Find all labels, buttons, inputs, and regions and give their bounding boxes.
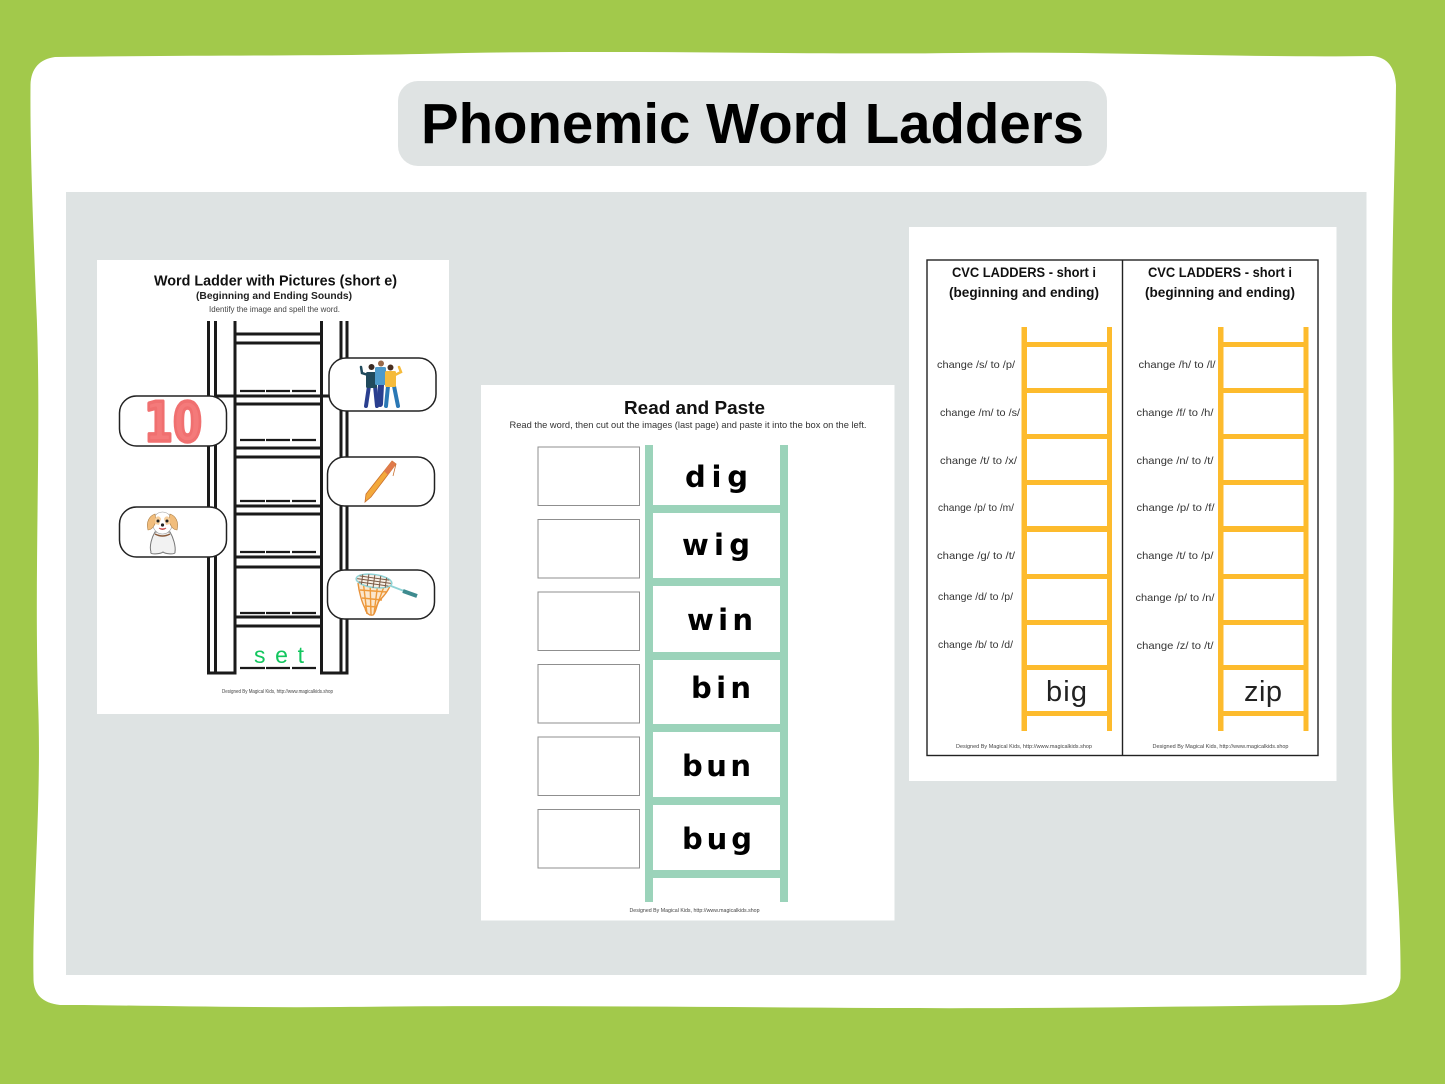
panel: word ladder with pictures worksheet: [97, 260, 449, 714]
panel: read and paste worksheet: [481, 385, 894, 920]
right column heading: [1145, 265, 1295, 300]
ladder words: wig: [682, 528, 750, 562]
ladder words: bun: [682, 749, 751, 783]
left change instructions: change /t/ to /x/: [940, 455, 1017, 467]
ladder word: zip: zip: [1244, 676, 1282, 708]
ladder word: big: big: [1046, 676, 1087, 708]
right change instructions: [1136, 359, 1216, 652]
left change instructions: change /s/ to /p/: [937, 359, 1015, 371]
right column heading: (beginning and ending): [1145, 285, 1295, 300]
right change instructions: change /p/ to /f/: [1136, 502, 1215, 514]
left change instructions: change /p/ to /m/: [938, 502, 1014, 514]
title: Phonemic Word Ladders: [421, 92, 1084, 156]
worksheet instruction: Read the word, then cut out the images (last page) and paste it into the box on the left.: [510, 420, 866, 431]
right change instructions: change /p/ to /n/: [1136, 592, 1215, 604]
right change instructions: change /n/ to /t/: [1136, 455, 1214, 467]
black ladder: [208, 321, 347, 673]
picture card: 10: 10: [144, 391, 202, 454]
paste boxes: [538, 447, 640, 868]
ladder words: win: [687, 603, 753, 637]
picture card: net: [328, 570, 434, 619]
green ladder: [645, 445, 788, 902]
worksheet heading: Read and Paste: [624, 397, 765, 418]
left column heading: (beginning and ending): [949, 285, 1099, 300]
left change instructions: [937, 359, 1020, 651]
ladder words: [682, 460, 753, 856]
ladder word: set: set: [254, 642, 305, 668]
right change instructions: change /z/ to /t/: [1136, 640, 1214, 652]
right credit: Designed By Magical Kids, http://www.magicalkids.shop: [1152, 744, 1289, 750]
worksheet subheading: (Beginning and Ending Sounds): [196, 290, 352, 302]
left change instructions: change /d/ to /p/: [938, 591, 1013, 603]
picture card: dog: [120, 507, 226, 557]
ladder words: bug: [682, 822, 752, 856]
ladder words: dig: [685, 460, 748, 494]
title pill: [398, 81, 1107, 166]
left yellow ladder: [1022, 327, 1112, 731]
picture card: people: [329, 358, 436, 411]
grey content panel: [66, 192, 1366, 975]
right change instructions: change /h/ to /l/: [1138, 359, 1216, 371]
right change instructions: change /f/ to /h/: [1136, 407, 1214, 419]
left column heading: CVC LADDERS - short i: [952, 265, 1096, 280]
right yellow ladder: [1218, 327, 1308, 731]
worksheet credit: Designed By Magical Kids, http://www.magicalkids.shop: [630, 908, 760, 914]
worksheet credit: Designed By Magical Kids, http://www.magicalkids.shop: [222, 689, 333, 695]
worksheet heading: Word Ladder with Pictures (short e): [154, 272, 397, 290]
right column heading: CVC LADDERS - short i: [1148, 265, 1292, 280]
panel: CVC ladders worksheet: [909, 227, 1336, 781]
left change instructions: change /b/ to /d/: [938, 639, 1013, 651]
left credit: Designed By Magical Kids, http://www.magicalkids.shop: [956, 744, 1092, 750]
worksheet instruction: Identify the image and spell the word.: [209, 305, 340, 314]
left change instructions: change /g/ to /t/: [937, 550, 1015, 562]
ladder words: bin: [691, 671, 751, 705]
left column heading: [949, 265, 1099, 300]
left change instructions: change /m/ to /s/: [940, 407, 1020, 419]
right change instructions: change /t/ to /p/: [1136, 550, 1214, 562]
picture card: pen: [328, 457, 434, 506]
